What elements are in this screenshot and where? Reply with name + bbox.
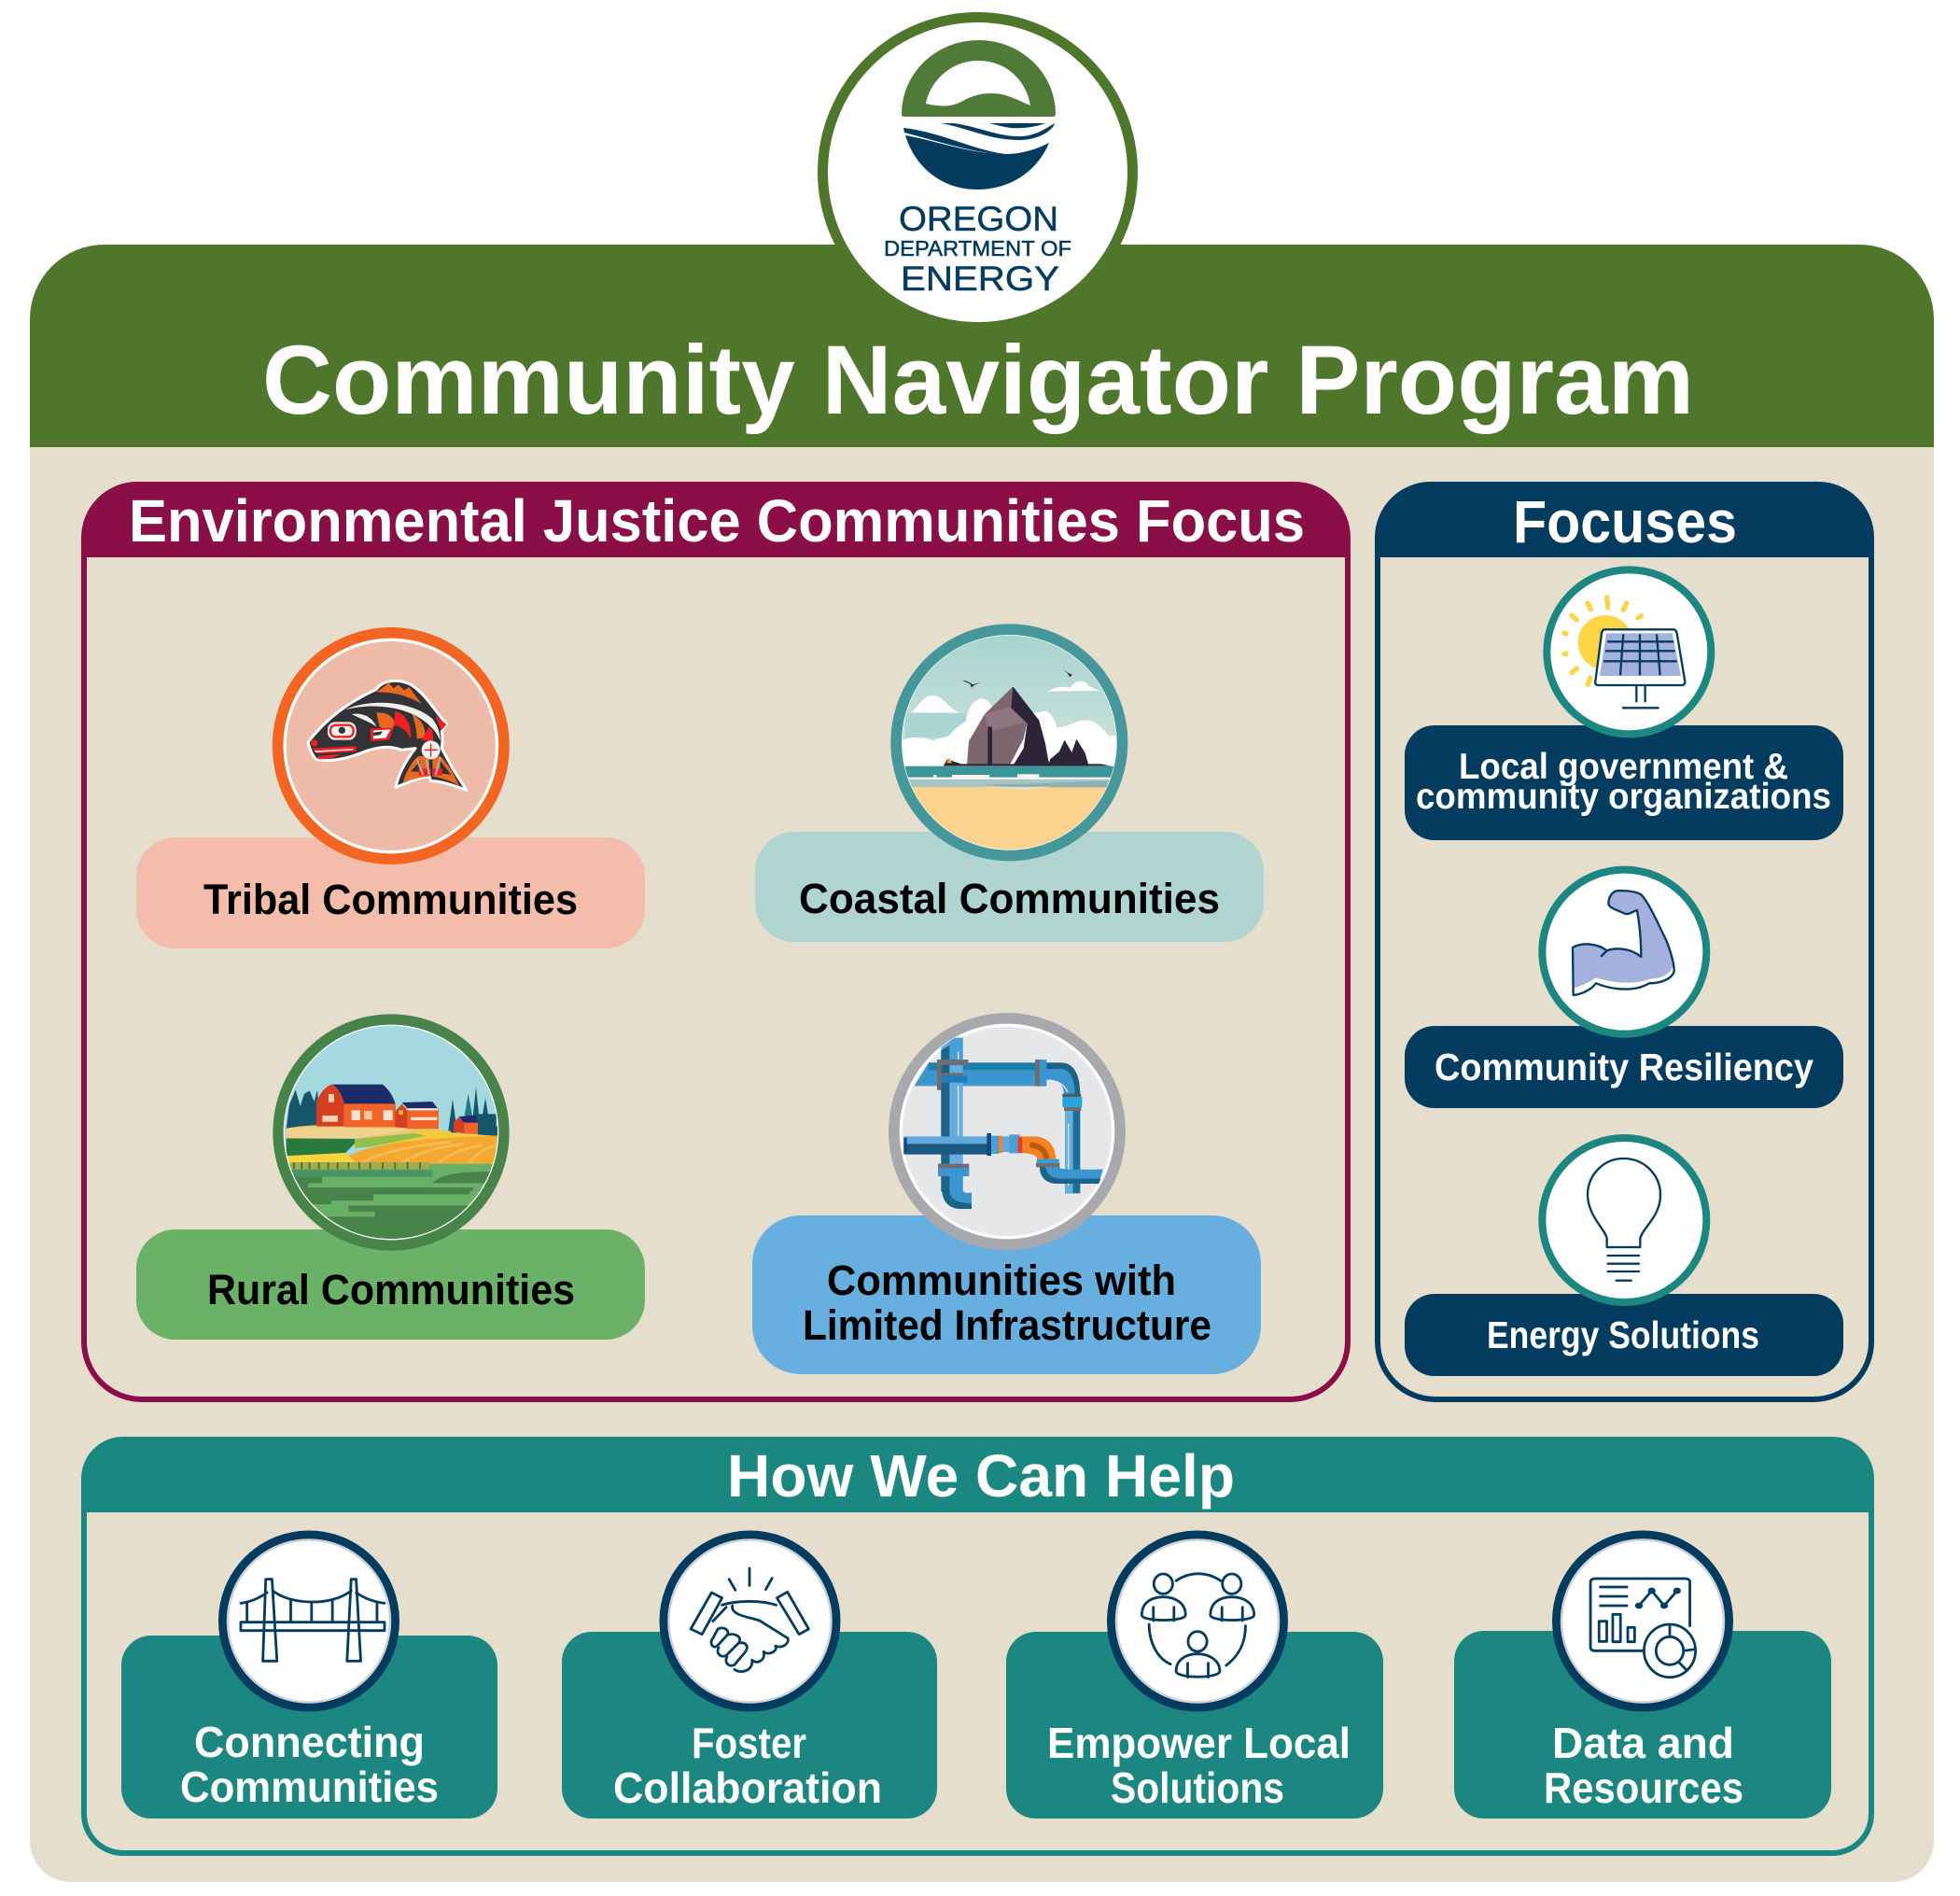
pill: Tribal Communities xyxy=(136,837,645,948)
logo wordmark: DEPARTMENT OF xyxy=(884,236,1071,260)
pill: Communities with Limited Infrastructure: Limited Infrastructure xyxy=(803,1301,1211,1349)
pill: Community Resiliency xyxy=(1405,1026,1843,1108)
pill: Community Resiliency: Community Resiliency xyxy=(1435,1046,1813,1088)
icon: data dashboard xyxy=(1557,1535,1729,1707)
icon: light bulb xyxy=(1542,1138,1706,1302)
card: Data and Resources: Data and xyxy=(1552,1719,1734,1767)
title banner xyxy=(30,245,1934,447)
card: Connecting Communities: Connecting xyxy=(194,1718,425,1766)
card: Foster Collaboration xyxy=(562,1632,937,1819)
icon: connected people xyxy=(1111,1535,1284,1707)
card: Foster Collaboration: Collaboration xyxy=(613,1763,882,1812)
card: Empower Local Solutions: Solutions xyxy=(1111,1763,1284,1812)
card: Connecting Communities: Communities xyxy=(180,1763,439,1811)
icon: pipes xyxy=(889,1013,1126,1250)
pill: Communities with Limited Infrastructure xyxy=(752,1215,1261,1374)
pill: Coastal Communities: Coastal Communities xyxy=(799,875,1220,922)
pill: Rural Communities xyxy=(136,1229,645,1340)
panel: Environmental Justice Communities Focus xyxy=(81,482,1351,1399)
card: Empower Local Solutions xyxy=(1006,1632,1383,1819)
heading: Focuses: Focuses xyxy=(1513,488,1737,555)
heading: Environmental Justice Communities Focus: Environmental Justice Communities Focus xyxy=(129,487,1305,555)
pill: Tribal Communities: Tribal Communities xyxy=(203,876,578,923)
icon: flexed arm xyxy=(1542,870,1706,1034)
icon: solar panel xyxy=(1547,569,1711,734)
icon: rural farm xyxy=(273,1014,510,1251)
icon: coastal sea stack xyxy=(890,624,1127,861)
logo wordmark: OREGON xyxy=(899,200,1058,238)
icon: handshake xyxy=(664,1535,836,1707)
pill: Communities with Limited Infrastructure: Communities with xyxy=(827,1257,1176,1304)
pill: Rural Communities: Rural Communities xyxy=(207,1266,575,1313)
heading: How We Can Help: How We Can Help xyxy=(727,1442,1235,1510)
pill: Energy Solutions xyxy=(1405,1294,1843,1376)
panel: How We Can Help xyxy=(81,1437,1874,1853)
card: Empower Local Solutions: Empower Local xyxy=(1047,1719,1351,1767)
card: Data and Resources xyxy=(1454,1631,1831,1819)
title: Community Navigator Program xyxy=(262,326,1694,435)
icon: tribal salmon xyxy=(273,627,510,864)
pill: Local government & community organizations xyxy=(1405,725,1843,840)
pill: Coastal Communities xyxy=(755,832,1264,942)
panel: Focuses xyxy=(1375,482,1874,1399)
pill: Local government & community organizations: community organizations xyxy=(1416,777,1831,817)
logo symbol: dome and water xyxy=(902,40,1056,190)
logo wordmark: ENERGY xyxy=(901,260,1059,298)
card: Connecting Communities xyxy=(121,1636,497,1819)
logo wordmark xyxy=(884,200,1071,298)
pill: Energy Solutions: Energy Solutions xyxy=(1487,1313,1759,1356)
card: Data and Resources: Resources xyxy=(1544,1763,1743,1812)
pill: Local government & community organizations: Local government & xyxy=(1459,747,1788,787)
card: Foster Collaboration: Foster xyxy=(692,1719,806,1767)
logo: Oregon Department of Energy xyxy=(823,17,1133,327)
icon: bridge xyxy=(222,1535,396,1707)
